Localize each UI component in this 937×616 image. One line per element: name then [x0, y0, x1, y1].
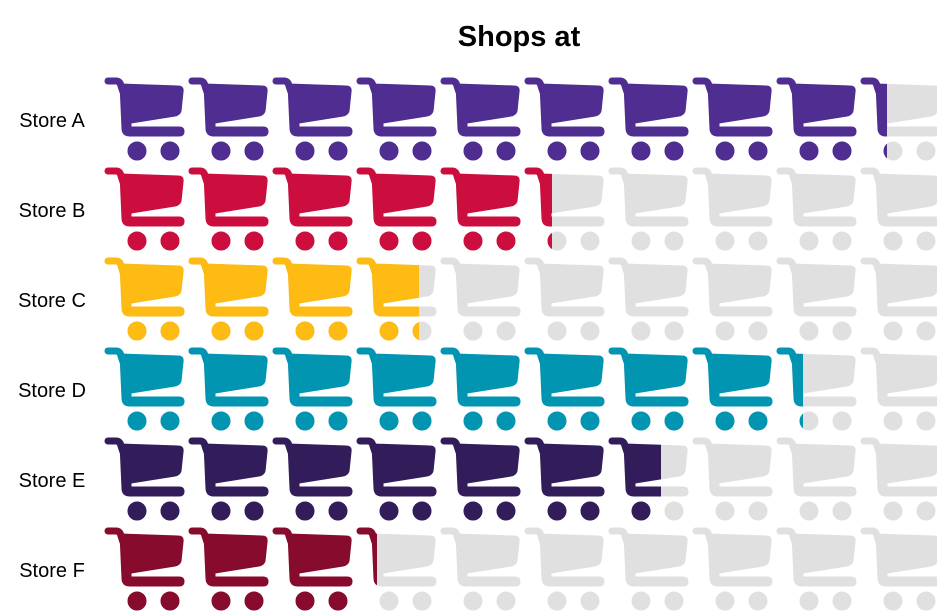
grey background carts	[108, 81, 937, 610]
row E carts	[104, 438, 661, 520]
row D carts	[104, 348, 803, 430]
row labels: Store E	[19, 470, 85, 492]
row F carts	[104, 528, 377, 610]
row labels: Store D	[18, 380, 86, 402]
row labels	[18, 110, 86, 582]
row labels: Store A	[19, 110, 85, 132]
row labels: Store B	[19, 200, 85, 222]
row B carts	[104, 168, 552, 250]
row C carts	[104, 258, 419, 340]
title: Shops at	[458, 21, 581, 53]
row labels: Store C	[18, 290, 86, 312]
row labels: Store F	[19, 560, 85, 582]
row A carts	[108, 81, 937, 160]
